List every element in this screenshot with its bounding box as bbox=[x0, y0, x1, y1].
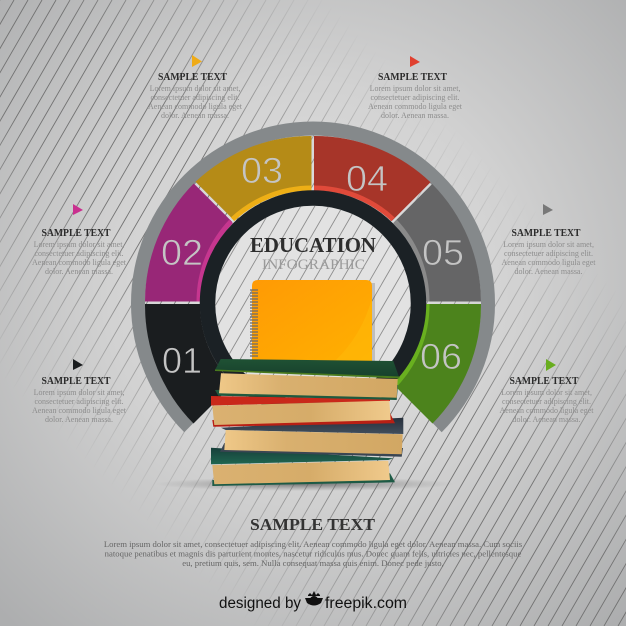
text block: 03: SAMPLE TEXT bbox=[158, 72, 227, 83]
text block: 03: Aenean commodo ligula eget bbox=[148, 102, 243, 111]
number 05: 05 bbox=[422, 232, 464, 273]
text block: 06: consectetuer adipiscing elit. bbox=[502, 397, 591, 406]
book 3 navy bbox=[220, 418, 403, 457]
inner colour rims bbox=[199, 188, 427, 386]
text block: 06: SAMPLE TEXT bbox=[510, 376, 578, 387]
number 04: 04 bbox=[346, 158, 388, 199]
text block: 01 bbox=[32, 376, 127, 424]
text block: 04: Lorem ipsum dolor sit amet, bbox=[370, 84, 460, 93]
segment 05 bbox=[394, 184, 481, 302]
book 2 red bbox=[211, 396, 395, 427]
text block: 05: consectetuer adipiscing elit. bbox=[504, 249, 593, 258]
text block: 06 bbox=[500, 376, 594, 424]
text block: 03: dolor. Aenean massa. bbox=[161, 111, 229, 120]
marker: yellow bbox=[192, 55, 202, 67]
book 4 green bbox=[211, 448, 395, 486]
text block: 01: SAMPLE TEXT bbox=[42, 376, 110, 387]
bottom text block bbox=[104, 515, 523, 568]
bottom paragraph: Lorem ipsum dolor sit amet, consectetuer adipiscing elit. Aenean commodo ligula eget dolor. Aenean massa. Cum sociis bbox=[104, 539, 523, 549]
text block: 02 bbox=[32, 228, 127, 276]
book shadow bbox=[155, 477, 455, 491]
bottom paragraph: eu, pretium quis, sem. Nulla consequat massa quis enim. Donec pede justo, bbox=[182, 558, 444, 568]
icon: book stack bbox=[211, 359, 403, 486]
title line 2: INFOGRAPHIC bbox=[262, 257, 365, 273]
text block: 01: Lorem ipsum dolor sit amet, bbox=[34, 388, 124, 397]
text block: 01: Aenean commodo ligula eget bbox=[32, 406, 127, 415]
number 03: 03 bbox=[241, 150, 283, 191]
book 1 green bbox=[215, 359, 399, 400]
number 06: 06 bbox=[420, 336, 462, 377]
text block: 04: dolor. Aenean massa. bbox=[381, 111, 449, 120]
icon: notebook bbox=[250, 280, 375, 361]
text block: 01: dolor. Aenean massa. bbox=[45, 415, 113, 424]
text block: 01: consectetuer adipiscing elit. bbox=[34, 397, 124, 406]
text block: 06: dolor. Aenean massa. bbox=[513, 415, 580, 424]
text block: 05: dolor. Aenean massa. bbox=[515, 267, 582, 276]
text block: 03: consectetuer adipiscing elit. bbox=[150, 93, 240, 102]
text block: 04: SAMPLE TEXT bbox=[378, 72, 447, 83]
credit bbox=[219, 591, 407, 612]
text block: 05: SAMPLE TEXT bbox=[512, 228, 580, 239]
segment 04 bbox=[314, 136, 430, 221]
title line 1: EDUCATION bbox=[250, 233, 376, 257]
marker: green bbox=[546, 359, 556, 371]
marker: red bbox=[410, 56, 420, 67]
title bbox=[250, 233, 376, 273]
black ring bbox=[208, 198, 418, 409]
text block: 06: Aenean commodo ligula eget bbox=[500, 406, 594, 415]
outer grey arc bbox=[131, 122, 495, 432]
text block: 02: Aenean commodo ligula eget bbox=[32, 258, 127, 267]
text block: 03 bbox=[148, 72, 243, 120]
segment 02 bbox=[145, 184, 232, 302]
icon: freepik crown bbox=[305, 591, 323, 606]
text block: 03: Lorem ipsum dolor sit amet, bbox=[150, 84, 240, 93]
spiral binding bbox=[250, 290, 258, 356]
text block: 04: consectetuer adipiscing elit. bbox=[370, 93, 460, 102]
text block: 06: Lorem ipsum dolor sit amet, bbox=[501, 388, 592, 397]
text block: 04: Aenean commodo ligula eget bbox=[368, 102, 463, 111]
marker: grey bbox=[543, 204, 553, 215]
credit: freepik.com bbox=[325, 595, 407, 612]
credit: designed by bbox=[219, 595, 301, 612]
number 01: 01 bbox=[162, 340, 202, 381]
text block: 05: Lorem ipsum dolor sit amet, bbox=[503, 240, 594, 249]
text block: 05 bbox=[502, 228, 596, 276]
text block: 02: consectetuer adipiscing elit. bbox=[34, 249, 124, 258]
segment 06 bbox=[393, 304, 481, 424]
number 02: 02 bbox=[161, 232, 203, 273]
text block: 04 bbox=[368, 72, 463, 120]
bottom heading: SAMPLE TEXT bbox=[250, 515, 375, 534]
text block: 02: SAMPLE TEXT bbox=[42, 228, 110, 239]
panel: wheel bbox=[131, 122, 495, 432]
segment 03 bbox=[196, 136, 312, 220]
text block: 05: Aenean commodo ligula eget bbox=[502, 258, 596, 267]
text block: 02: dolor. Aenean massa. bbox=[45, 267, 113, 276]
bottom paragraph: natoque penatibus et magnis dis parturient montes, nascetur ridiculus mus. Donec quam felis, ultricies nec, pellentesque bbox=[105, 548, 521, 558]
inner disc stripes bbox=[215, 206, 411, 398]
segment 01 bbox=[145, 304, 233, 424]
marker: magenta bbox=[73, 204, 83, 215]
marker: black bbox=[73, 359, 83, 370]
text block: 02: Lorem ipsum dolor sit amet, bbox=[34, 240, 124, 249]
bottom paragraph bbox=[104, 539, 523, 568]
